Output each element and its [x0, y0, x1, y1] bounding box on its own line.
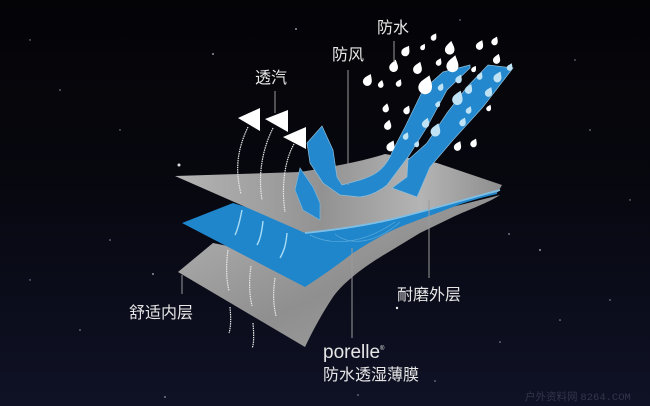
water drops on bands: [402, 62, 514, 148]
breathability arrowheads: [238, 108, 306, 149]
membrane faint curves: [310, 222, 400, 242]
label: windproof: 防风: [332, 46, 364, 64]
label: inner lining: 舒适内层: [129, 304, 193, 322]
label: breathable: 透汽: [255, 69, 287, 87]
label: waterproof: 防水: [377, 19, 409, 37]
water drops: [361, 32, 502, 153]
torn shell piece: [295, 168, 320, 220]
label: membrane: 防水透湿薄膜: [323, 366, 419, 384]
outer shell lower edge highlight: [305, 190, 500, 233]
layer: comfort inner lining: [178, 195, 500, 347]
layer: durable outer shell: [175, 154, 502, 233]
label: porelle brand: porelle: [323, 342, 380, 363]
label: porelle brand: ®: [380, 345, 385, 352]
vapour lines in membrane: [235, 210, 287, 258]
fold band: windproof left: [307, 65, 470, 197]
layer: porelle membrane: [182, 190, 497, 287]
leader lines: [182, 41, 429, 338]
label: outer shell: 耐磨外层: [397, 286, 461, 304]
fold band: waterproof right: [392, 65, 513, 197]
vapour lines: [227, 127, 294, 348]
watermark: 户外资料网 8264.COM: [525, 390, 631, 404]
